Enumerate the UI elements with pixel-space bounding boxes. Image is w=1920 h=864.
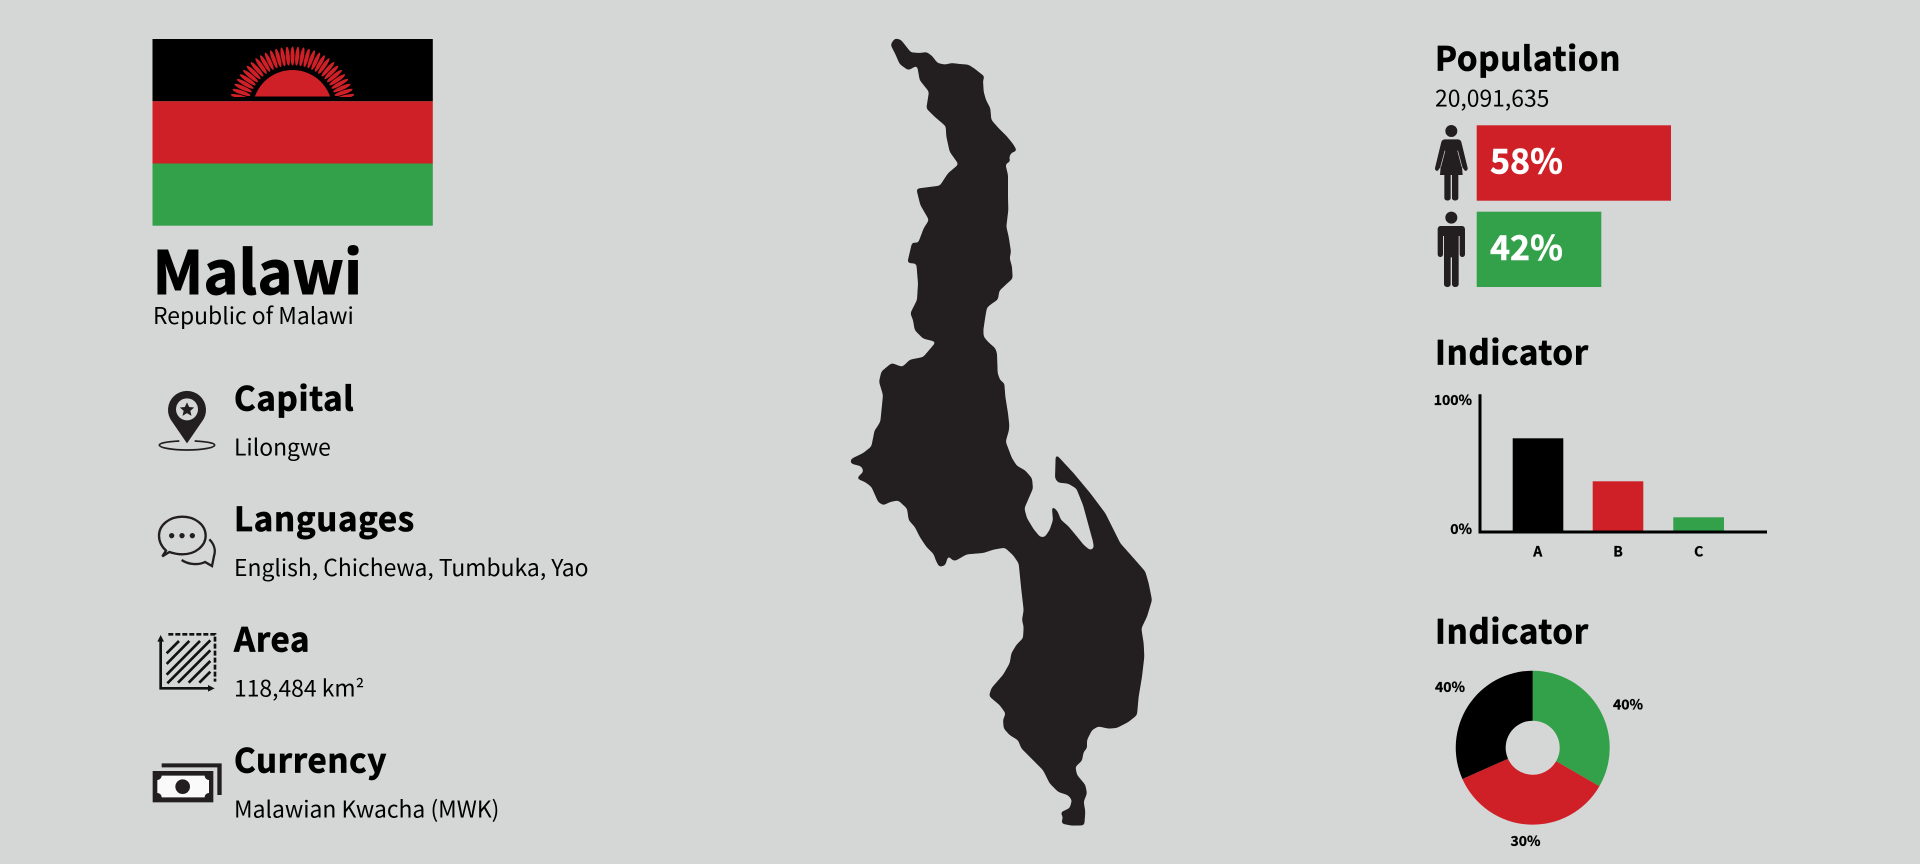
panel: area xyxy=(157,614,364,704)
donut chart: 30% xyxy=(1510,831,1541,851)
donut chart: 40% xyxy=(1435,677,1466,697)
map of Malawi xyxy=(851,39,1152,825)
heading: area: Area xyxy=(233,614,310,662)
bar chart: B xyxy=(1613,542,1623,562)
donut chart xyxy=(1435,671,1644,851)
panel: population xyxy=(1435,33,1671,287)
icon: rising sun xyxy=(230,46,355,101)
heading: capital: Capital xyxy=(234,373,354,421)
bar chart: A xyxy=(1532,542,1543,562)
text: languages value: English, Chichewa, Tumbuka, Yao xyxy=(234,549,589,583)
panel: capital xyxy=(159,373,354,463)
bar: female share: 58% xyxy=(1490,134,1563,183)
panel: languages xyxy=(159,493,589,583)
icon: female figure xyxy=(1435,125,1468,200)
icon: speech bubbles xyxy=(159,517,215,566)
heading: indicator: Indicator xyxy=(1435,605,1589,653)
text: area value: 118,484 km² xyxy=(234,670,364,704)
icon: hatched area square xyxy=(157,634,215,692)
icon: male figure xyxy=(1438,212,1465,287)
bar chart xyxy=(1434,390,1767,562)
text: population total: 20,091,635 xyxy=(1435,80,1549,114)
title: country name: Malawi xyxy=(152,226,362,312)
heading: languages: Languages xyxy=(234,493,415,541)
panel: bar indicator xyxy=(1434,326,1767,562)
bar chart: 100% xyxy=(1434,390,1473,410)
heading: population: Population xyxy=(1435,33,1621,81)
heading: currency: Currency xyxy=(234,734,387,782)
bar: male share: 42% xyxy=(1490,221,1563,270)
bar chart: 0% xyxy=(1450,519,1473,539)
bar: male share xyxy=(1477,212,1601,287)
bar: female share xyxy=(1477,125,1671,201)
icon: map pin xyxy=(159,391,215,450)
flag of Malawi xyxy=(152,39,433,226)
text: capital value: Lilongwe xyxy=(234,429,331,463)
bar chart: C xyxy=(1694,542,1703,562)
icon: banknotes xyxy=(153,763,222,802)
heading: indicator: Indicator xyxy=(1435,326,1589,374)
text: currency value: Malawian Kwacha (MWK) xyxy=(234,790,499,824)
subtitle: official name: Republic of Malawi xyxy=(153,297,354,331)
donut chart: 40% xyxy=(1613,694,1644,714)
panel: currency xyxy=(153,734,499,824)
panel: donut indicator xyxy=(1435,605,1644,851)
